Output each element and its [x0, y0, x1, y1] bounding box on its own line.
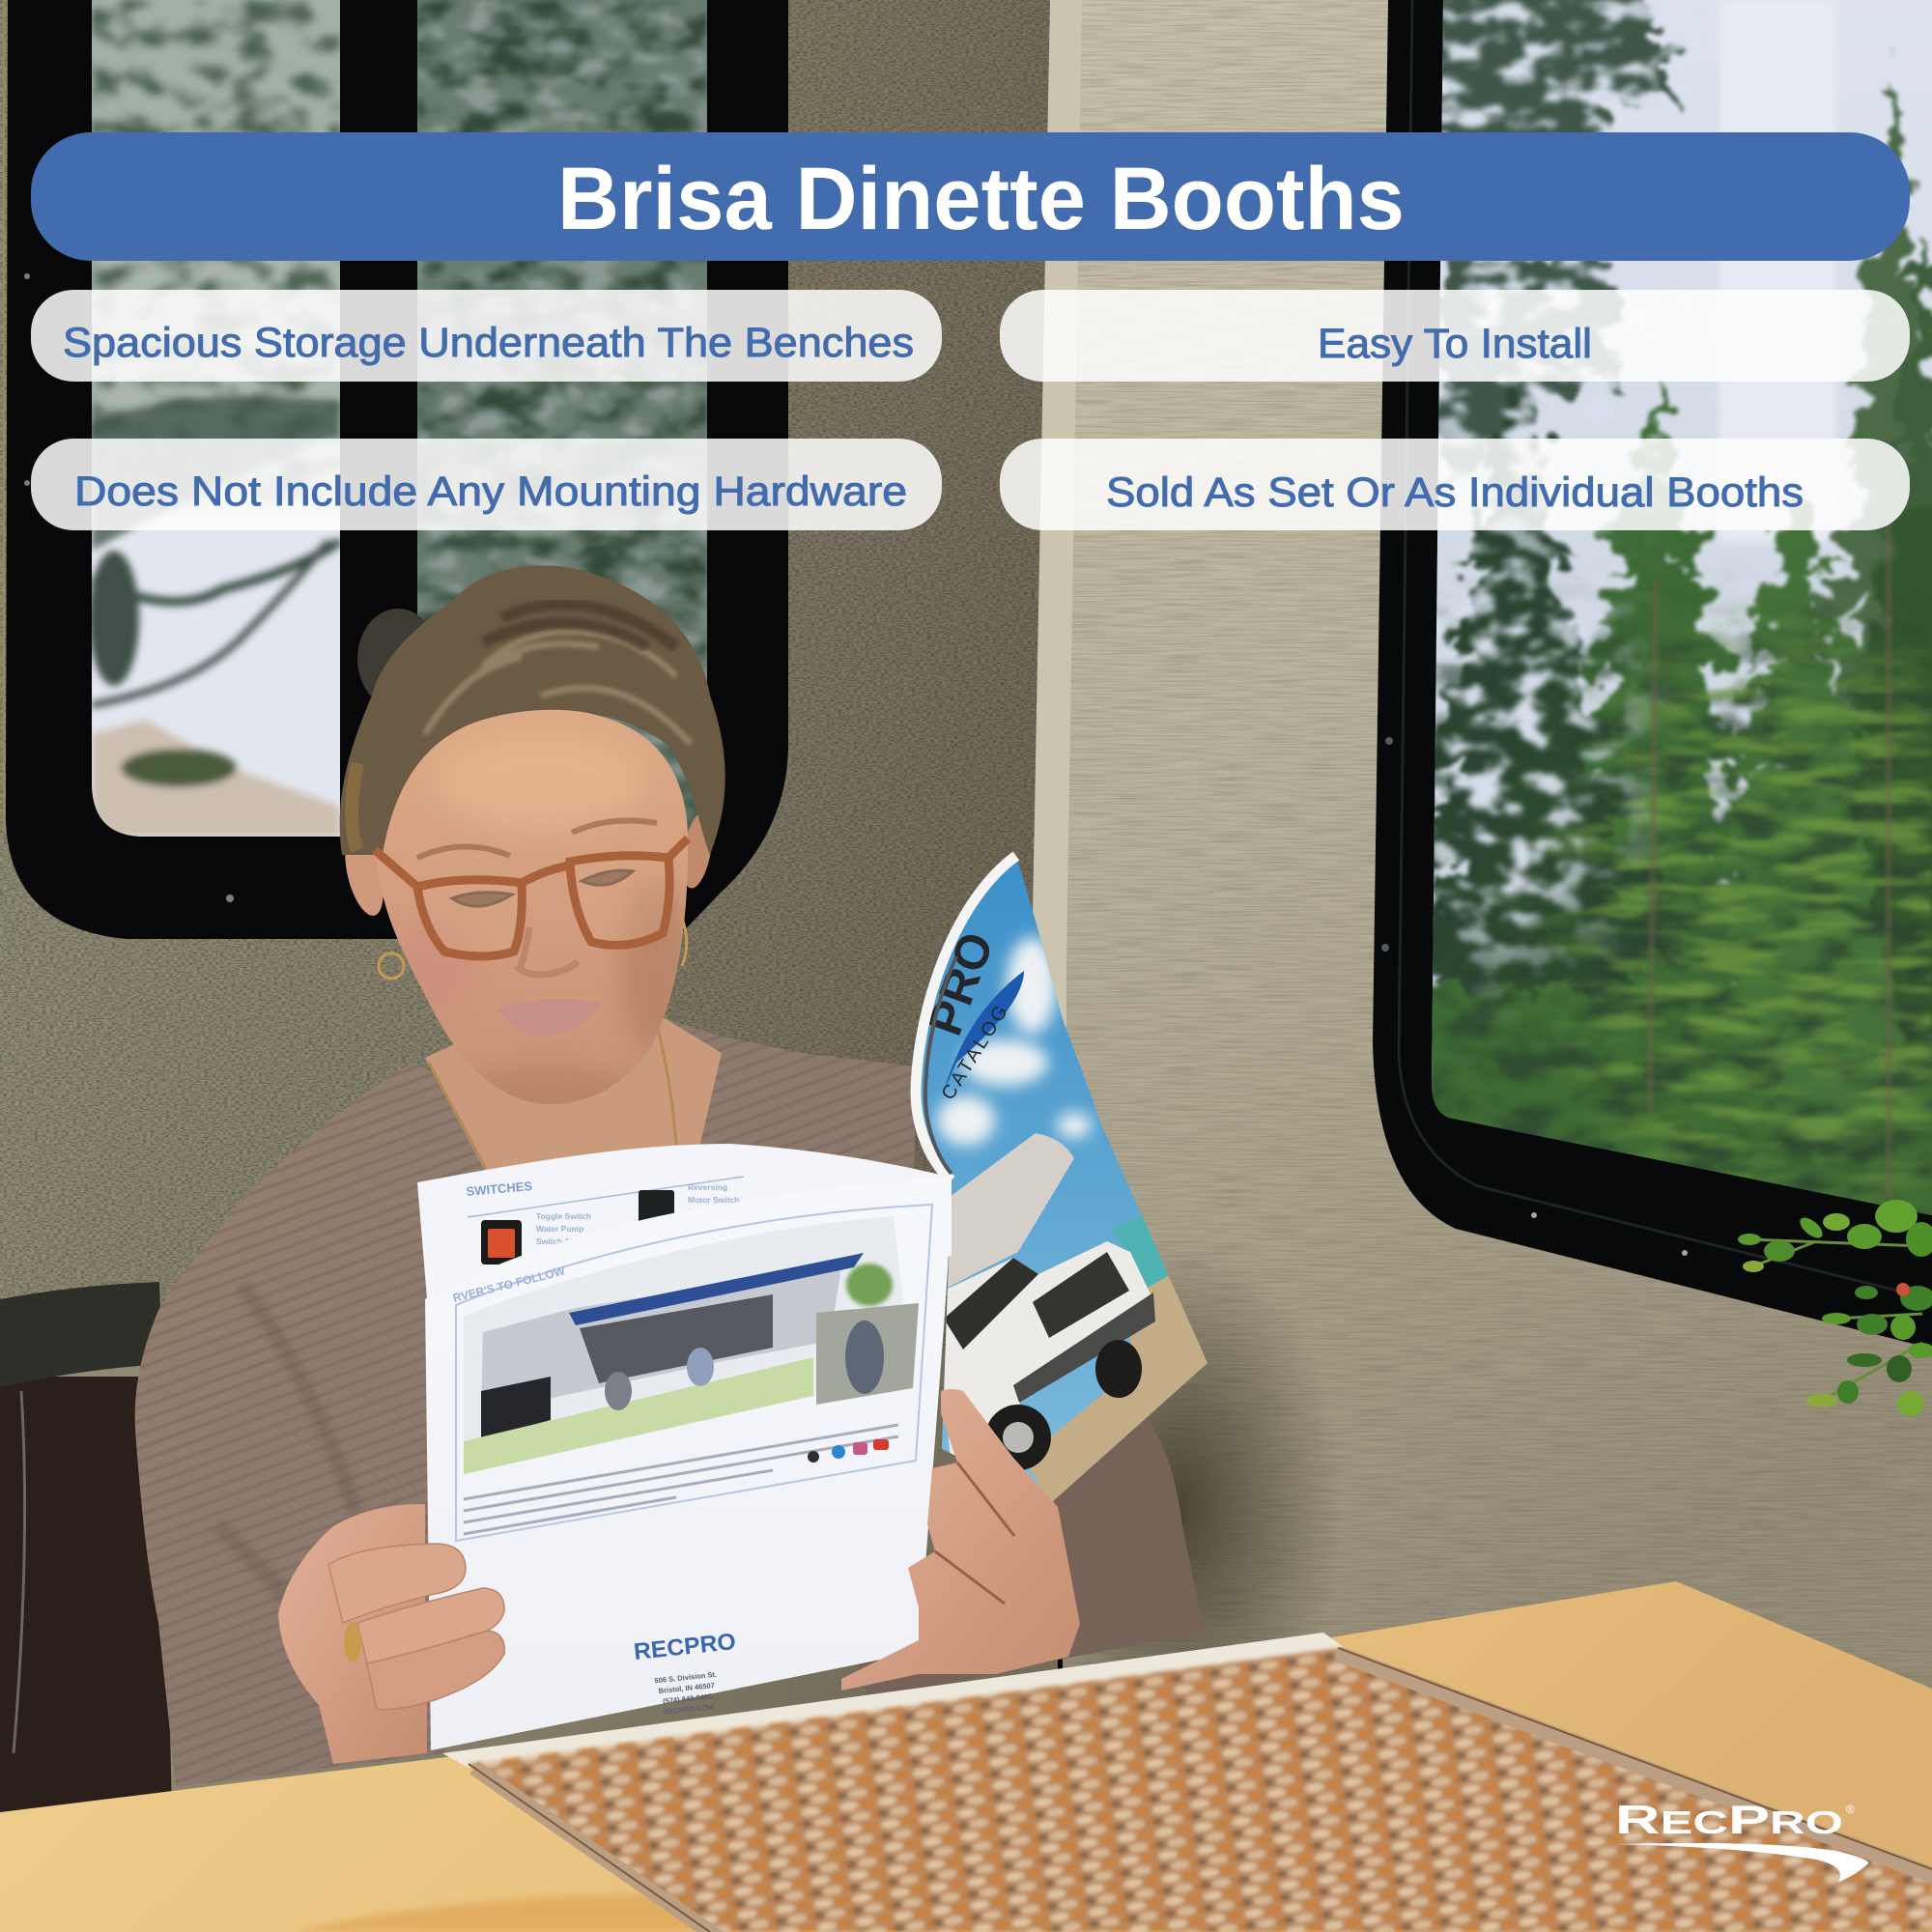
back address: (574) 848-0495 — [663, 1691, 713, 1706]
feature pill: set or individual — [1000, 439, 1910, 530]
feature pill: storage — [31, 290, 942, 382]
switch labels: Reversing — [688, 1182, 727, 1192]
feature pill: hardware — [31, 439, 942, 530]
window pane with fir trees — [1432, 0, 1932, 1215]
right linen wall — [1014, 0, 1932, 1777]
cover truck body — [942, 1241, 1154, 1468]
sweater ribs — [135, 1016, 916, 1787]
back page panel — [468, 1177, 744, 1217]
bench cushion — [0, 1377, 172, 1816]
sweater right arm — [850, 1418, 1205, 1700]
face — [375, 708, 688, 1104]
hand back and wrist — [278, 1504, 427, 1764]
left hand — [278, 1504, 504, 1764]
trailer front — [481, 1377, 551, 1439]
finger creases — [935, 1463, 1014, 1604]
finger 3 — [367, 1631, 504, 1710]
cover RV cab-over — [944, 1133, 1074, 1290]
window frame — [1373, 0, 1932, 1349]
page paragraph — [464, 1425, 898, 1534]
necklace — [429, 1024, 676, 1169]
logo wordmark: R EC P RO — [1615, 1797, 1843, 1842]
cover truck wheels — [985, 1340, 1142, 1470]
finger 2 — [357, 1588, 504, 1663]
eyebrows — [417, 821, 657, 858]
plant — [1738, 1200, 1932, 1416]
cover truck bumper — [1013, 1293, 1155, 1403]
lips — [497, 999, 601, 1037]
left burlap wall — [0, 0, 1058, 1932]
placemat border — [474, 1654, 1932, 1932]
feature text: Sold As Set Or As Individual Booths — [1106, 469, 1804, 516]
tree — [846, 1264, 893, 1306]
page inner panel — [456, 1205, 932, 1541]
social icons — [808, 1439, 889, 1463]
back page heading: SWITCHES — [466, 1179, 533, 1199]
title banner — [31, 132, 1910, 261]
switch labels: Toggle Switch — [536, 1211, 591, 1221]
switch labels: Switch 12V — [536, 1236, 580, 1246]
cover truck window — [944, 1258, 1038, 1350]
cover clouds — [937, 937, 1092, 1146]
red switch — [481, 1220, 522, 1264]
cover swoosh — [944, 971, 1024, 1092]
catalog — [417, 856, 1217, 1750]
catalog front page — [425, 1178, 952, 1750]
window pane: right — [417, 0, 707, 840]
catalog back page — [417, 1144, 952, 1333]
cover sea — [1113, 1213, 1171, 1289]
back logo: RECPRO — [633, 1629, 737, 1665]
switch labels — [536, 1182, 739, 1246]
trailer — [481, 1266, 841, 1413]
right hand — [841, 1389, 1080, 1690]
feature photo — [464, 1216, 919, 1474]
logo registered mark: ® — [1846, 1803, 1855, 1816]
switch labels: Water Pump — [536, 1224, 583, 1234]
window screws — [1381, 737, 1688, 1256]
window frame — [6, 0, 788, 939]
page heading: RVER'S TO FOLLOW — [451, 1264, 567, 1305]
window screws — [24, 273, 234, 902]
trailer dark side — [580, 1294, 773, 1383]
awning — [569, 1253, 864, 1325]
title text: Brisa Dinette Booths — [557, 150, 1405, 248]
right ear — [677, 810, 718, 891]
earrings — [379, 916, 687, 979]
back address: Bristol, IN 46507 — [658, 1681, 715, 1695]
sweater body — [135, 1016, 916, 1787]
sweater fold — [217, 1285, 357, 1604]
left ear — [338, 829, 390, 920]
logo swoosh — [1615, 1843, 1868, 1882]
catalog back cover — [916, 856, 1217, 1507]
plant leaves — [1738, 1200, 1932, 1416]
finger 1 — [328, 1544, 466, 1623]
woman's head — [338, 565, 725, 1136]
black switch — [639, 1190, 674, 1227]
plant berry — [1896, 1283, 1910, 1296]
cover logo text: PRO — [918, 925, 1004, 1042]
placemat weave — [469, 1648, 1932, 1932]
eyes — [452, 870, 633, 906]
feature pill: install — [1000, 290, 1910, 382]
hair — [340, 565, 725, 855]
back address — [654, 1670, 717, 1717]
inset photo — [816, 1303, 919, 1405]
wall corner trim — [1032, 0, 1082, 1352]
switch labels: 12V — [688, 1208, 702, 1217]
glasses — [375, 838, 688, 956]
placemat border edge — [469, 1648, 1932, 1932]
placemat — [442, 1633, 1932, 1932]
logo: RecPro — [1615, 1797, 1868, 1882]
cover catalog text: CATALOG — [938, 1000, 1013, 1104]
neck and chest — [425, 1005, 722, 1173]
seated people — [605, 1348, 714, 1410]
window frame ridge — [1399, 0, 1932, 1299]
ring — [344, 1622, 361, 1662]
back address: RECPRO.COM — [664, 1702, 714, 1717]
right window — [1343, 0, 1932, 1349]
feature text: Spacious Storage Underneath The Benches — [63, 320, 914, 366]
cover ground — [1030, 1267, 1208, 1501]
feature text: Easy To Install — [1318, 321, 1592, 367]
window pane: left — [89, 0, 340, 840]
bench seam — [14, 1391, 25, 1753]
left window — [4, 0, 788, 939]
bench — [0, 1282, 172, 1816]
inset couple — [845, 1321, 884, 1394]
plant stems — [1749, 1239, 1922, 1401]
top-left branches — [1439, 0, 1681, 502]
switch labels: Motor Switch — [688, 1195, 739, 1205]
wire along the wall — [3, 0, 5, 831]
bench bolster — [0, 1282, 162, 1387]
face shading — [412, 742, 686, 1104]
table front edge — [290, 1893, 734, 1932]
nose — [517, 927, 578, 975]
placemat white cloth — [442, 1633, 1348, 1768]
feature text: Does Not Include Any Mounting Hardware — [74, 469, 907, 515]
sweater — [135, 1016, 1205, 1787]
grass — [464, 1357, 813, 1474]
back address: 506 S. Division St. — [654, 1670, 717, 1685]
catalog spine — [916, 856, 1016, 1180]
table — [0, 1581, 1932, 1932]
cover truck grille — [1033, 1252, 1129, 1338]
